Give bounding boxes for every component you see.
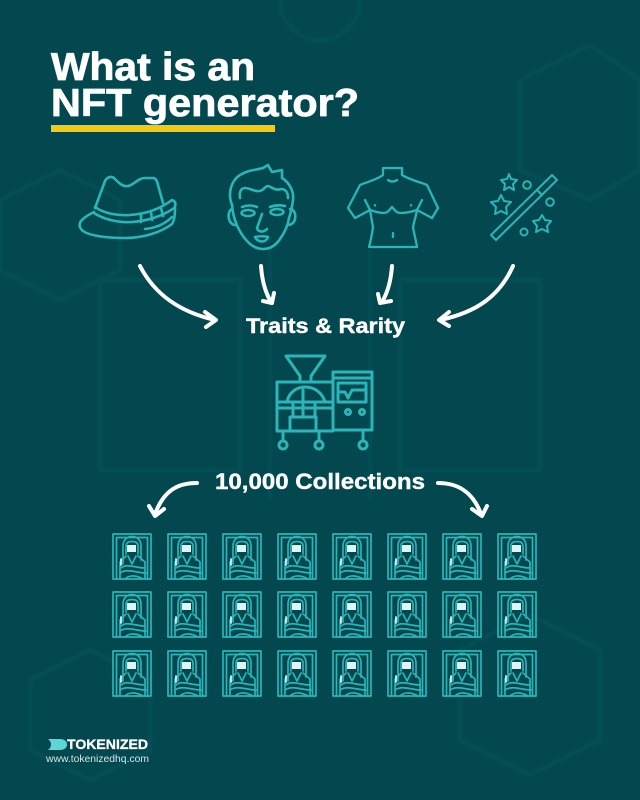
icon: hat — [80, 177, 175, 238]
icon: magic wand with stars — [491, 174, 557, 240]
arrow: face to traits — [261, 266, 274, 303]
arrow: collections right — [438, 483, 487, 516]
arrow: wand to traits — [439, 266, 513, 326]
arrow: hat to traits — [140, 266, 216, 327]
title underline — [51, 125, 275, 132]
website url: www.tokenizedhq.com — [45, 753, 149, 765]
brand name: TOKENIZED — [67, 737, 148, 752]
icon: face — [229, 165, 295, 249]
logo mark — [48, 739, 67, 750]
arrow: collections left — [149, 483, 197, 516]
label: traits and rarity: Traits & Rarity — [246, 315, 405, 338]
title: What is an — [51, 46, 255, 89]
icon: torso — [348, 168, 438, 247]
portrait grid — [113, 534, 536, 696]
label: 10,000 collections: 10,000 Collections — [215, 469, 425, 494]
title — [51, 46, 359, 125]
arrow: torso to traits — [378, 266, 392, 303]
icon: generator machine — [277, 356, 372, 449]
title: NFT generator? — [51, 82, 359, 125]
